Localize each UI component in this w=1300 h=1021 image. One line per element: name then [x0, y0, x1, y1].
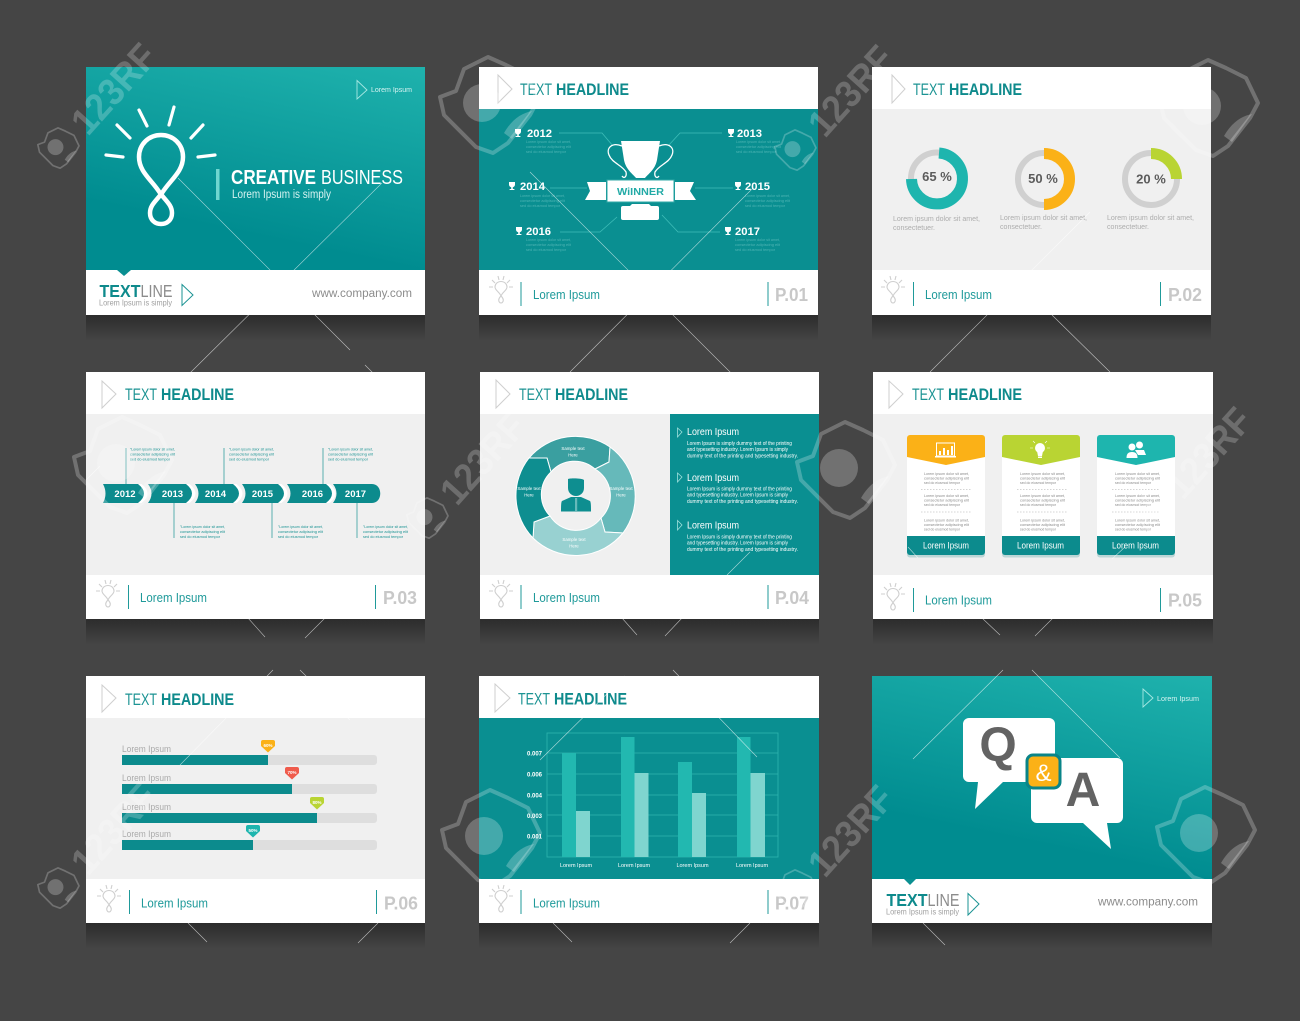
timeline arrows: [103, 484, 380, 503]
timeline years: 2014: [205, 489, 227, 500]
card 3: consectetur adipiscing elit: [1115, 476, 1160, 480]
panel: P.07 bar chart: [479, 676, 819, 923]
footer: [881, 276, 1202, 306]
footer: [489, 580, 809, 609]
bar chart: 0.003: [527, 814, 543, 820]
timeline notes: [130, 448, 408, 539]
bar 50 percent: 50%: [248, 828, 258, 833]
info column: dummy text of the printing and typesetting industry.: [687, 547, 798, 553]
cycle labels: Here: [569, 544, 579, 548]
card 3: sed do eiusmod tempor: [1115, 503, 1152, 507]
footer: P.05: [1168, 590, 1202, 610]
timeline notes: "Lorem ipsum dolor sit amet,: [363, 525, 408, 529]
timeline years: consectetur adipiscing elit: [526, 145, 571, 149]
card 1: sed do eiusmod tempor: [924, 503, 961, 507]
bar 70 percent: 70%: [287, 770, 297, 775]
donut captions: Lorem ipsum dolor sit amet,: [1107, 213, 1194, 222]
heading: HEADLINE: [555, 386, 628, 404]
footer: P.07: [775, 894, 809, 914]
timeline years: 2013: [737, 128, 762, 140]
bar 60 percent: 60%: [263, 743, 273, 748]
timeline years: 2017: [735, 226, 760, 238]
bar 70 percent: [122, 767, 377, 794]
bar chart: Lorem Ipsum: [736, 863, 768, 869]
info column: dummy text of the printing and typesetting industry.: [687, 454, 798, 460]
footer: P.02: [1168, 285, 1202, 305]
timeline years: 2012: [114, 489, 136, 500]
card 1: Lorem ipsum dolor sit amet,: [924, 472, 969, 476]
timeline years: Lorem ipsum dolor sit amet,: [526, 140, 571, 144]
heading: HEADLINE: [161, 386, 234, 404]
diagonal watermark lines: [86, 172, 1125, 945]
website: www.company.com: [311, 288, 412, 300]
bar chart: [527, 733, 778, 869]
arrow: header: [496, 380, 510, 408]
watermark overlay: 123RF: [800, 778, 903, 885]
timeline years: 2012: [527, 128, 552, 140]
bar chart: 0.001: [527, 834, 543, 840]
timeline connectors: [126, 448, 357, 538]
timeline years: consectetur adipiscing elit: [735, 243, 780, 247]
footer: [96, 580, 417, 609]
timeline years: Lorem ipsum dolor sit amet,: [736, 140, 781, 144]
timeline notes: sed do eiusmod tempor: [328, 458, 369, 462]
panel: P.02 donut charts: [872, 67, 1211, 315]
timeline years: sed do eiusmod tempor: [735, 248, 776, 252]
cycle labels: Sample text: [517, 486, 541, 491]
timeline years: consectetur adipiscing elit: [745, 199, 790, 203]
donut 20 percent: 20 %: [1136, 172, 1166, 186]
cycle labels: Here: [524, 492, 534, 498]
heading: HEADLINE: [556, 81, 629, 99]
timeline notes: consectetur adipiscing elit: [130, 452, 175, 456]
info column: [678, 426, 798, 553]
heading: TEXT: [913, 81, 945, 99]
bar 60 percent: [122, 740, 377, 765]
timeline years: 2014: [520, 181, 546, 193]
slide shadows: [86, 315, 1213, 949]
cycle labels: Here: [568, 452, 578, 458]
card 1: Lorem ipsum dolor sit amet,: [924, 518, 969, 522]
donut 65 percent: [911, 152, 963, 204]
icon: answer bubble: [1031, 758, 1123, 849]
info column: Lorem Ipsum: [687, 426, 739, 438]
donut 20 percent: [1125, 153, 1177, 205]
footer: Lorem Ipsum: [140, 591, 207, 605]
bar 80 percent: 80%: [312, 800, 322, 805]
footer: Lorem Ipsum: [533, 288, 600, 302]
panel: P.06 progress bars: [86, 676, 425, 923]
timeline notes: sed do eiusmod tempor: [363, 535, 404, 539]
brand textline: TEXT: [886, 890, 928, 910]
heading: TEXT: [125, 386, 157, 404]
timeline years: consectetur adipiscing elit: [736, 145, 781, 149]
info column: dummy text of the printing and typesetting industry.: [687, 499, 798, 505]
bar 80 percent: [122, 797, 377, 823]
icon: people: [1126, 442, 1146, 458]
timeline notes: consectetur adipiscing elit: [229, 452, 274, 456]
brand textline: LINE: [140, 281, 172, 301]
donut captions: consectetuer.: [893, 223, 935, 232]
timeline notes: consectetur adipiscing elit: [278, 530, 323, 534]
icon: person: [561, 478, 591, 512]
timeline years: consectetur adipiscing elit: [526, 243, 571, 247]
timeline notes: "Lorem ipsum dolor sit amet,: [229, 448, 274, 452]
footer: Lorem Ipsum: [925, 288, 992, 302]
timeline notes: "Lorem ipsum dolor sit amet,: [130, 448, 175, 452]
timeline years: 2015: [745, 181, 770, 193]
watermark overlay: 123RF: [63, 36, 166, 143]
footer: Lorem Ipsum: [533, 591, 600, 605]
timeline notes: sed do eiusmod tempor: [229, 458, 270, 462]
card 2: sed do eiusmod tempor: [1020, 481, 1057, 485]
heading: [912, 386, 1022, 404]
bar chart: Lorem Ipsum: [676, 863, 709, 869]
card 2: Lorem Ipsum: [1017, 540, 1064, 550]
icon: trophy: [585, 141, 696, 220]
info column: and typesetting industry. Lorem Ipsum is simply: [687, 447, 788, 453]
brand textline: Lorem Ipsum is simply: [99, 298, 172, 308]
heading: [519, 386, 628, 404]
timeline notes: "Lorem ipsum dolor sit amet,: [328, 448, 373, 452]
heading: HEADLINE: [554, 690, 627, 708]
card 1: Lorem ipsum dolor sit amet,: [924, 494, 969, 498]
arrow: brand: [968, 894, 979, 915]
panel: P.04 cycle diagram: [480, 372, 819, 619]
panel: P.03 timeline: [86, 372, 425, 619]
icon: answer bubble: A: [1066, 764, 1100, 817]
arrow: brand: [182, 284, 193, 306]
bar 80 percent: Lorem Ipsum: [122, 802, 171, 813]
bar 70 percent: Lorem Ipsum: [122, 773, 171, 784]
panel: P.01 winner: [479, 67, 818, 315]
card 1: [907, 435, 985, 558]
bar chart: 0.007: [527, 752, 543, 758]
footer: Lorem Ipsum: [141, 896, 208, 910]
card 3: consectetur adipiscing elit: [1115, 523, 1160, 527]
icon: monitor chart: [935, 443, 956, 458]
watermark overlay: 123RF: [800, 38, 903, 145]
timeline notes: consectetur adipiscing elit: [328, 452, 373, 456]
timeline notes: "Lorem ipsum dolor sit amet,: [278, 525, 323, 529]
footer: Lorem Ipsum: [925, 594, 992, 608]
card 1: sed do eiusmod tempor: [924, 481, 961, 485]
bar chart: Lorem Ipsum: [618, 863, 650, 869]
heading: [913, 81, 1022, 99]
title text: CREATIVE: [231, 167, 316, 189]
card 1: consectetur adipiscing elit: [924, 498, 969, 502]
footer: P.03: [383, 588, 417, 608]
arrow: top right: [357, 80, 367, 99]
donut 65 percent: 65 %: [922, 169, 952, 184]
timeline years: sed do eiusmod tempor: [526, 248, 567, 252]
arrow: header: [102, 381, 116, 408]
footer: P.01: [775, 285, 808, 305]
card 3: sed do eiusmod tempor: [1115, 481, 1152, 485]
timeline notes: "Lorem ipsum dolor sit amet,: [180, 525, 225, 529]
card 3: [1097, 435, 1175, 558]
brand textline: Lorem Ipsum is simply: [886, 908, 959, 916]
timeline years: [114, 489, 366, 500]
card 3: Lorem ipsum dolor sit amet,: [1115, 472, 1160, 476]
icon: ampersand badge: [1027, 755, 1060, 788]
arrow: header: [102, 685, 116, 712]
heading: TEXT: [520, 81, 552, 99]
timeline years: consectetur adipiscing elit: [520, 199, 565, 203]
donut captions: consectetuer.: [1000, 222, 1042, 231]
timeline notes: sed do eiusmod tempor: [180, 535, 221, 539]
heading: HEADLINE: [161, 691, 234, 709]
card 3: Lorem Ipsum: [1112, 540, 1159, 550]
card 2: consectetur adipiscing elit: [1020, 498, 1065, 502]
heading: [520, 81, 629, 99]
bar 50 percent: Lorem Ipsum: [122, 829, 171, 840]
website: www.company.com: [1097, 896, 1198, 908]
heading: HEADLINE: [948, 386, 1022, 404]
arrow: header: [495, 684, 510, 712]
card 1: Lorem Ipsum: [923, 540, 969, 550]
icon: question bubble: Q: [979, 719, 1017, 772]
subtitle: Lorem Ipsum is simply: [232, 189, 331, 201]
donut captions: Lorem ipsum dolor sit amet,: [893, 214, 980, 223]
top right label: Lorem Ipsum: [1157, 694, 1199, 703]
footer: [489, 885, 809, 914]
donut 50 percent: 50 %: [1028, 171, 1058, 186]
timeline years: sed do eiusmod tempor: [520, 204, 561, 208]
cycle labels: Sample text: [562, 537, 586, 542]
icon: bulb: [1030, 441, 1050, 458]
brand textline: [99, 281, 172, 308]
card 3: consectetur adipiscing elit: [1115, 498, 1160, 502]
footer: Lorem Ipsum: [533, 896, 600, 910]
info column: Lorem Ipsum is simply dummy text of the printing: [687, 534, 792, 540]
timeline years: 2016: [302, 489, 323, 500]
card 1: consectetur adipiscing elit: [924, 476, 969, 480]
panel: title slide creative business: [86, 67, 425, 315]
info column: and typesetting industry. Lorem Ipsum is simply: [687, 492, 788, 498]
info column: and typesetting industry. Lorem Ipsum is simply: [687, 540, 788, 546]
timeline years: 2015: [252, 489, 274, 500]
footer: [489, 276, 808, 306]
timeline years: Lorem ipsum dolor sit amet,: [526, 238, 571, 242]
banner text: WiINNER: [617, 186, 664, 198]
donut captions: Lorem ipsum dolor sit amet,: [1000, 213, 1087, 222]
top right label: Lorem Ipsum: [371, 85, 412, 94]
icon: light bulb: [106, 107, 215, 224]
info column: Lorem Ipsum is simply dummy text of the printing: [687, 486, 792, 492]
heading: [125, 386, 234, 404]
cycle labels: [517, 446, 633, 548]
title text: BUSINESS: [321, 167, 403, 189]
bar chart: Lorem Ipsum: [560, 863, 592, 869]
bar chart: 0.004: [527, 794, 543, 800]
footer: [881, 583, 1202, 612]
card 2: Lorem ipsum dolor sit amet,: [1020, 472, 1065, 476]
card 2: consectetur adipiscing elit: [1020, 476, 1065, 480]
info column: Lorem Ipsum: [687, 520, 739, 532]
card 3: sed do eiusmod tempor: [1115, 528, 1152, 532]
bar chart: 0.006: [527, 772, 543, 778]
card 2: sed do eiusmod tempor: [1020, 528, 1057, 532]
info column: Lorem Ipsum: [687, 472, 739, 484]
timeline years: 2016: [526, 226, 551, 238]
accent bar: [216, 169, 220, 200]
heading: [518, 690, 627, 708]
card 2: Lorem ipsum dolor sit amet,: [1020, 494, 1065, 498]
footer: P.04: [775, 588, 809, 608]
info column: Lorem Ipsum is simply dummy text of the printing: [687, 441, 792, 447]
timeline years: [509, 128, 790, 252]
timeline years: Lorem ipsum dolor sit amet,: [745, 194, 790, 198]
icon: ampersand badge: &: [1035, 760, 1052, 787]
watermark overlay: 123RF: [432, 406, 535, 513]
timeline notes: sed do eiusmod tempor: [278, 535, 319, 539]
arrow: header: [889, 381, 903, 408]
timeline notes: consectetur adipiscing elit: [363, 530, 408, 534]
panel: P.05 three cards: [873, 372, 1213, 619]
card 2: consectetur adipiscing elit: [1020, 523, 1065, 527]
timeline years: Lorem ipsum dolor sit amet,: [735, 238, 780, 242]
donut captions: consectetuer.: [1107, 222, 1149, 231]
brand textline: LINE: [928, 890, 960, 910]
cycle labels: Here: [616, 492, 626, 498]
brand textline: [886, 890, 960, 916]
arrow: header: [892, 75, 905, 103]
bar 60 percent: Lorem Ipsum: [122, 744, 171, 755]
brand textline: TEXT: [100, 281, 141, 301]
card 1: consectetur adipiscing elit: [924, 523, 969, 527]
title text: [231, 167, 403, 189]
icon: question bubble: [963, 718, 1055, 809]
panel: Q and A slide: [872, 676, 1212, 923]
card 2: [1002, 435, 1080, 558]
bar 50 percent: [122, 825, 377, 850]
heading: TEXT: [518, 690, 550, 708]
donut captions: [893, 213, 1194, 232]
timeline years: sed do eiusmod tempor: [736, 150, 777, 154]
arrow: header: [498, 75, 512, 103]
footer: P.06: [384, 894, 418, 914]
timeline years: sed do eiusmod tempor: [745, 204, 786, 208]
card 3: Lorem ipsum dolor sit amet,: [1115, 494, 1160, 498]
timeline years: 2017: [345, 489, 366, 500]
card 1: sed do eiusmod tempor: [924, 528, 961, 532]
cycle chart: [516, 436, 635, 555]
heading: [125, 691, 234, 709]
heading: TEXT: [912, 386, 944, 404]
watermark overlay: 123RF: [1158, 400, 1261, 507]
timeline notes: consectetur adipiscing elit: [180, 530, 225, 534]
heading: HEADLINE: [949, 81, 1022, 99]
arrow: top right: [1143, 689, 1153, 707]
heading: TEXT: [519, 386, 551, 404]
timeline years: sed do eiusmod tempor: [526, 150, 567, 154]
card 3: Lorem ipsum dolor sit amet,: [1115, 518, 1160, 522]
connectors: [550, 133, 733, 232]
timeline notes: sed do eiusmod tempor: [130, 458, 171, 462]
timeline years: Lorem ipsum dolor sit amet,: [520, 194, 565, 198]
cycle labels: Sample text: [561, 446, 585, 451]
timeline years: 2013: [162, 489, 183, 500]
cycle labels: Sample text: [609, 486, 633, 491]
heading: TEXT: [125, 691, 157, 709]
card 2: Lorem ipsum dolor sit amet,: [1020, 518, 1065, 522]
card 2: sed do eiusmod tempor: [1020, 503, 1057, 507]
watermark overlay: 123RF: [63, 776, 166, 883]
donut 50 percent: [1018, 153, 1070, 205]
footer: [97, 885, 418, 914]
